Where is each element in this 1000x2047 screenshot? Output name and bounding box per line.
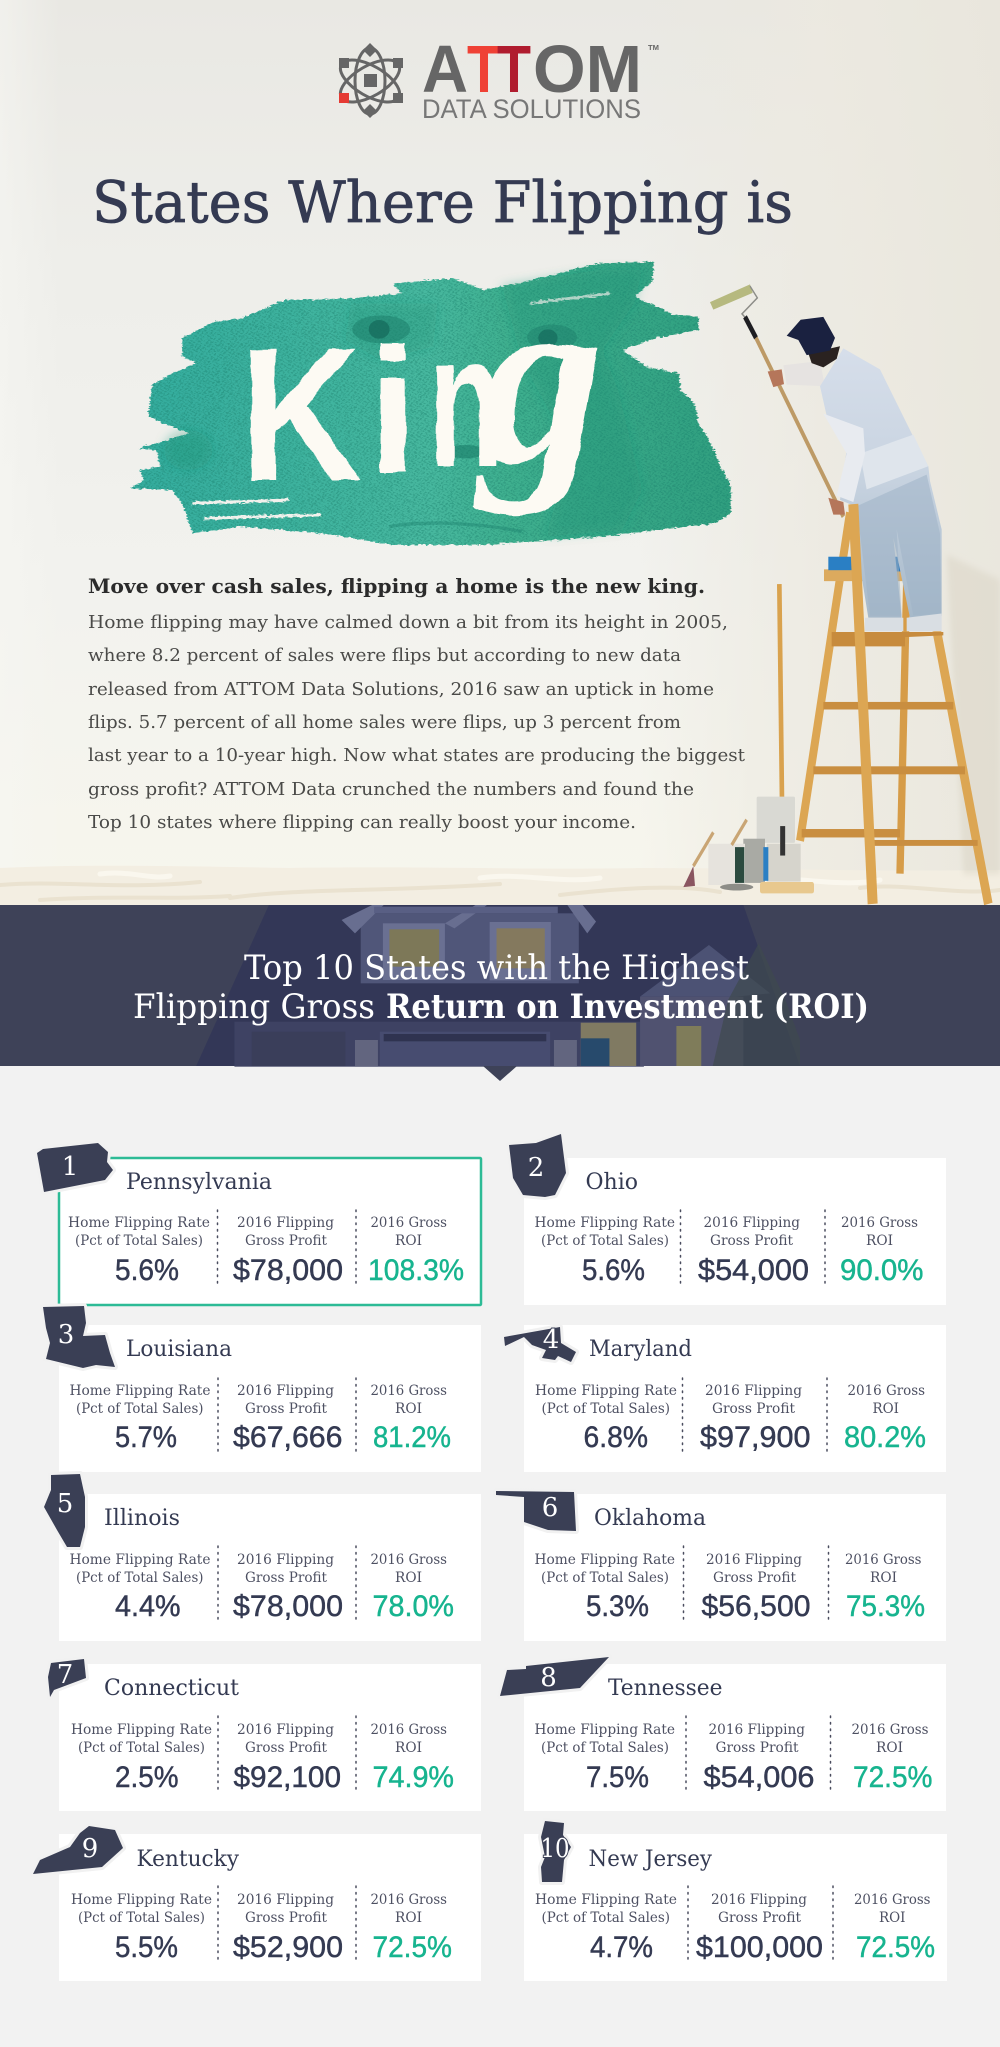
metric: gross profit: $100,000 — [696, 1931, 823, 1964]
metric: flipping rate — [535, 1383, 677, 1454]
metric: flipping rate: (Pct of Total Sales) — [76, 1570, 204, 1586]
wordmark: OM — [533, 32, 642, 107]
metric: gross profit: Gross Profit — [718, 1910, 801, 1926]
metric: gross profit: Gross Profit — [713, 1570, 796, 1586]
icon: New Jersey — [540, 1821, 571, 1882]
title: States Where Flipping is — [92, 170, 793, 236]
trademark: TM — [648, 45, 659, 52]
metric: flipping rate: 7.5% — [586, 1761, 649, 1794]
metric: gross ROI — [844, 1383, 926, 1454]
metric: gross ROI: 72.5% — [853, 1761, 932, 1794]
metric: gross profit: Gross Profit — [716, 1740, 799, 1756]
card 7: Connecticut — [48, 1659, 481, 1811]
wordmark — [422, 32, 642, 107]
metric: gross ROI: 2016 Gross — [845, 1552, 922, 1568]
headline word: King — [240, 240, 604, 521]
metric: gross ROI: 2016 Gross — [848, 1383, 925, 1399]
metric: gross ROI — [370, 1892, 452, 1964]
panel: teal brush stroke — [130, 240, 731, 545]
metric: flipping rate: (Pct of Total Sales) — [542, 1401, 670, 1417]
metric: gross profit: Gross Profit — [245, 1401, 327, 1417]
intro heading: Move over cash sales, flipping a home is the new king. — [88, 574, 705, 598]
metric: gross ROI — [840, 1215, 924, 1287]
metric: gross profit: Gross Profit — [245, 1570, 327, 1586]
drop cloth floor — [0, 866, 1000, 905]
metric: flipping rate: Home Flipping Rate — [534, 1215, 675, 1231]
light streaks — [192, 293, 610, 518]
headline word: King: g — [473, 240, 604, 517]
metric: flipping rate — [534, 1215, 675, 1287]
metric: flipping rate: 5.6% — [115, 1254, 179, 1287]
metric: gross profit: $54,006 — [704, 1761, 814, 1794]
metric: gross profit — [696, 1892, 823, 1964]
wordmark: T — [467, 32, 501, 107]
metric: flipping rate: 5.6% — [582, 1254, 645, 1287]
metric: gross profit: $97,900 — [700, 1421, 810, 1454]
metric: gross ROI: ROI — [395, 1570, 422, 1586]
heading line two: Flipping Gross — [133, 987, 375, 1027]
metric: flipping rate — [534, 1722, 675, 1794]
metric: gross ROI: 2016 Gross — [370, 1215, 447, 1231]
metric: gross ROI — [370, 1722, 454, 1794]
metric: gross ROI: 2016 Gross — [852, 1722, 928, 1738]
metric: gross ROI — [852, 1722, 932, 1794]
intro paragraph — [88, 612, 746, 833]
logo: ATTOM Data Solutions — [334, 32, 659, 124]
card 1: Pennsylvania — [37, 1143, 481, 1305]
metric: flipping rate: (Pct of Total Sales) — [541, 1570, 669, 1586]
metric: flipping rate: (Pct of Total Sales) — [541, 1740, 669, 1756]
state name: Maryland — [589, 1337, 692, 1362]
state name: Ohio — [586, 1170, 638, 1195]
metric: gross profit — [700, 1383, 810, 1454]
metric: gross ROI — [370, 1383, 451, 1454]
wordmark: T — [497, 32, 531, 107]
metric: gross profit — [233, 1215, 343, 1287]
metric: gross profit — [234, 1722, 341, 1794]
metric: gross ROI: 2016 Gross — [370, 1892, 447, 1908]
metric: gross profit: 2016 Flipping — [706, 1552, 802, 1568]
paint roller — [710, 284, 843, 517]
metric: gross ROI: 74.9% — [372, 1761, 454, 1794]
heading line two: Return on Investment (ROI) — [386, 987, 869, 1027]
metric: gross ROI: ROI — [879, 1910, 906, 1926]
state name: Oklahoma — [594, 1506, 706, 1531]
metric: gross profit: Gross Profit — [245, 1233, 327, 1249]
banner: section heading — [0, 905, 1000, 1067]
metric: gross profit: $92,100 — [234, 1761, 341, 1794]
state name: Tennessee — [608, 1676, 722, 1701]
metric: gross profit: 2016 Flipping — [711, 1892, 807, 1908]
metric: flipping rate: Home Flipping Rate — [70, 1552, 210, 1568]
icon: Tennessee — [500, 1657, 609, 1696]
metric: gross profit: 2016 Flipping — [237, 1215, 334, 1231]
icon: Kentucky: 9 — [82, 1834, 98, 1864]
metric: flipping rate: 5.7% — [115, 1421, 177, 1454]
metric: flipping rate: Home Flipping Rate — [70, 1383, 210, 1399]
arrow: banner pointer — [483, 1066, 517, 1081]
metric: flipping rate: 6.8% — [584, 1421, 648, 1454]
metric: gross profit: $56,500 — [702, 1590, 810, 1623]
heading line two — [133, 987, 869, 1027]
leaning stick — [779, 584, 783, 856]
card 3: Louisiana — [43, 1306, 481, 1472]
metric: flipping rate: 4.4% — [115, 1590, 180, 1623]
metric: gross ROI: 2016 Gross — [370, 1383, 447, 1399]
metric: gross ROI: ROI — [395, 1401, 422, 1417]
headline word: King: n — [428, 295, 504, 507]
metric: gross ROI — [368, 1215, 464, 1287]
icon: Maryland — [504, 1325, 576, 1362]
card 8: Tennessee — [500, 1657, 946, 1811]
metric: gross ROI: 2016 Gross — [841, 1215, 918, 1231]
paint cans and brushes — [683, 797, 814, 893]
metric: gross ROI: 2016 Gross — [370, 1722, 447, 1738]
metric: flipping rate: Home Flipping Rate — [535, 1892, 677, 1908]
icon: Maryland: 4 — [543, 1325, 559, 1355]
intro paragraph: released from ATTOM Data Solutions, 2016 saw an uptick in home — [88, 679, 714, 700]
front ladder rail — [853, 504, 873, 904]
icon: Connecticut: 7 — [57, 1660, 73, 1690]
metric: gross ROI: ROI — [872, 1401, 899, 1417]
metric: gross profit: $54,000 — [698, 1254, 809, 1287]
metric: gross ROI: 2016 Gross — [854, 1892, 930, 1908]
icon: atom network — [334, 43, 406, 118]
metric: gross profit — [233, 1383, 342, 1454]
card 4: Maryland — [504, 1325, 946, 1472]
card 10: New Jersey — [524, 1821, 947, 1981]
metric: gross ROI: 90.0% — [840, 1254, 924, 1287]
metric: flipping rate: 5.5% — [115, 1931, 178, 1964]
metric: flipping rate: (Pct of Total Sales) — [76, 1401, 204, 1417]
painter body — [768, 317, 942, 631]
metric: gross profit — [698, 1215, 809, 1287]
metric: gross profit: $78,000 — [233, 1254, 343, 1287]
metric: gross ROI: 78.0% — [372, 1590, 454, 1623]
wall shadow — [947, 555, 1000, 874]
card 2: Ohio — [509, 1134, 946, 1305]
panel: hero wall photo — [0, 0, 1000, 905]
metric: flipping rate: Home Flipping Rate — [534, 1722, 675, 1738]
metric: gross profit: 2016 Flipping — [704, 1215, 800, 1231]
card 5: Illinois — [44, 1474, 481, 1641]
metric: flipping rate — [70, 1552, 210, 1623]
metric: flipping rate — [70, 1383, 210, 1454]
card 6: Oklahoma — [496, 1491, 946, 1641]
metric: flipping rate — [535, 1892, 677, 1964]
heading line one: Top 10 States with the Highest — [244, 948, 749, 988]
metric: gross profit — [233, 1892, 343, 1964]
metric: gross profit — [233, 1552, 343, 1623]
metric: flipping rate: Home Flipping Rate — [68, 1215, 210, 1231]
metric: flipping rate: (Pct of Total Sales) — [541, 1233, 669, 1249]
metric: gross profit: Gross Profit — [710, 1233, 793, 1249]
intro paragraph: Top 10 states where flipping can really boost your income. — [88, 812, 636, 833]
icon: Ohio: 2 — [528, 1153, 544, 1183]
metric: flipping rate — [71, 1722, 212, 1794]
state name: Illinois — [104, 1506, 180, 1531]
metric: flipping rate: 5.3% — [586, 1590, 649, 1623]
metric: gross profit: Gross Profit — [245, 1910, 327, 1926]
state name: Kentucky — [136, 1847, 240, 1872]
metric: gross profit: 2016 Flipping — [237, 1892, 334, 1908]
wordmark: A — [422, 32, 468, 107]
metric: flipping rate: (Pct of Total Sales) — [542, 1910, 670, 1926]
icon: Tennessee: 8 — [540, 1663, 557, 1693]
intro paragraph: flips. 5.7 percent of all home sales were flips, up 3 percent from — [88, 712, 681, 733]
metric: flipping rate: (Pct of Total Sales) — [78, 1910, 205, 1926]
metric: gross ROI — [370, 1552, 454, 1623]
state name: Connecticut — [104, 1676, 239, 1701]
metric: gross profit — [702, 1552, 810, 1623]
metric: flipping rate — [68, 1215, 210, 1287]
intro paragraph: gross profit? ATTOM Data crunched the numbers and found the — [88, 779, 694, 800]
metric: gross ROI: 81.2% — [373, 1421, 451, 1454]
headline word: King: i — [368, 311, 418, 510]
metric: gross profit: 2016 Flipping — [705, 1383, 802, 1399]
metric: gross ROI: 75.3% — [846, 1590, 925, 1623]
icon: Ohio — [509, 1134, 566, 1197]
metric: flipping rate: Home Flipping Rate — [71, 1722, 212, 1738]
icon: Illinois — [44, 1474, 85, 1547]
headline word: King: K — [240, 309, 362, 521]
state name: New Jersey — [588, 1847, 713, 1872]
metric: flipping rate: Home Flipping Rate — [535, 1383, 677, 1399]
metric: gross ROI: 108.3% — [368, 1254, 464, 1287]
metric: gross ROI: ROI — [395, 1910, 422, 1926]
ladder — [800, 513, 988, 904]
state name: Louisiana — [126, 1337, 232, 1362]
icon: Pennsylvania — [37, 1143, 113, 1192]
metric: flipping rate — [534, 1552, 675, 1623]
icon: Louisiana — [43, 1306, 115, 1368]
metric: gross profit: $78,000 — [233, 1590, 343, 1623]
intro paragraph: last year to a 10-year high. Now what states are producing the biggest — [88, 745, 746, 766]
metric: gross profit: $52,900 — [233, 1931, 343, 1964]
state name: Pennsylvania — [126, 1170, 272, 1195]
metric: gross ROI: ROI — [395, 1740, 422, 1756]
metric: gross ROI: 2016 Gross — [370, 1552, 447, 1568]
metric: gross profit: $67,666 — [233, 1421, 342, 1454]
metric: flipping rate: 2.5% — [115, 1761, 178, 1794]
intro paragraph: Home flipping may have calmed down a bit from its height in 2005, — [88, 612, 728, 633]
metric: gross ROI — [845, 1552, 925, 1623]
house image — [196, 905, 800, 1067]
metric: gross ROI: ROI — [395, 1233, 422, 1249]
metric: flipping rate: (Pct of Total Sales) — [75, 1233, 203, 1249]
metric: gross ROI: 72.5% — [856, 1931, 935, 1964]
metric: gross ROI — [854, 1892, 935, 1964]
icon: Kentucky — [33, 1826, 123, 1874]
icon: Oklahoma — [496, 1491, 576, 1531]
metric: gross ROI: ROI — [870, 1570, 897, 1586]
metric: gross profit: Gross Profit — [712, 1401, 795, 1417]
metric: gross profit: 2016 Flipping — [237, 1383, 334, 1399]
intro copy — [88, 574, 746, 833]
shadow planes of the face — [164, 270, 642, 537]
icon: New Jersey: 10 — [540, 1834, 570, 1864]
metric: gross ROI: ROI — [876, 1740, 903, 1756]
metric: gross profit: Gross Profit — [245, 1740, 327, 1756]
metric: gross profit: 2016 Flipping — [237, 1722, 334, 1738]
metric: gross ROI: 72.5% — [372, 1931, 452, 1964]
metric: gross ROI: ROI — [866, 1233, 893, 1249]
metric: flipping rate: Home Flipping Rate — [534, 1552, 675, 1568]
metric: gross ROI: 80.2% — [844, 1421, 926, 1454]
intro paragraph: where 8.2 percent of sales were flips but according to new data — [88, 645, 681, 666]
metric: flipping rate: Home Flipping Rate — [71, 1892, 212, 1908]
icon: Pennsylvania: 1 — [62, 1152, 78, 1182]
metric: flipping rate: 4.7% — [590, 1931, 653, 1964]
metric: gross profit: 2016 Flipping — [237, 1552, 334, 1568]
card 9: Kentucky — [33, 1826, 481, 1981]
icon: Louisiana: 3 — [58, 1320, 74, 1350]
tagline: DATA SOLUTIONS — [422, 94, 641, 124]
icon: Connecticut — [48, 1659, 86, 1697]
metric: flipping rate: (Pct of Total Sales) — [78, 1740, 205, 1756]
illustration: painter on ladder — [683, 284, 1000, 904]
icon: Oklahoma: 6 — [542, 1493, 558, 1523]
metric: flipping rate — [71, 1892, 212, 1964]
metric: gross profit: 2016 Flipping — [708, 1722, 805, 1738]
icon: Illinois: 5 — [57, 1489, 73, 1519]
metric: gross profit — [704, 1722, 814, 1794]
